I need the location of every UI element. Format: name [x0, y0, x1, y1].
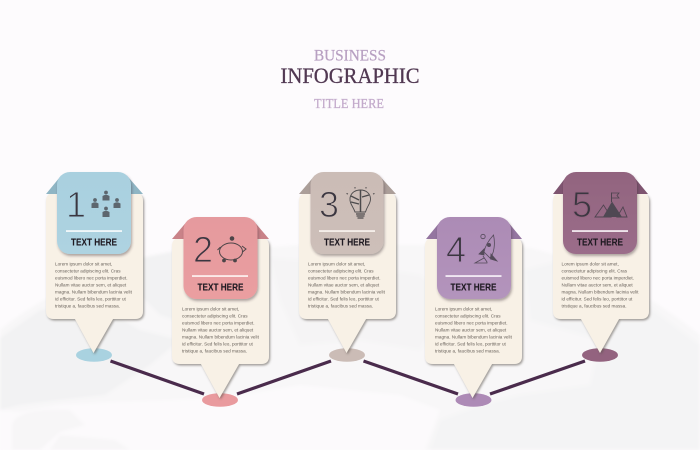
body text 4: consectetur adipiscing elit. Cras [435, 314, 501, 318]
label 4: TEXT HERE [450, 282, 497, 294]
body text 3: Nullam vitae auctor sem, et aliquet [308, 282, 380, 288]
number 3: 3 [319, 184, 339, 225]
ribbon folds 3 [299, 176, 396, 194]
divider 3 [319, 230, 375, 232]
body text 3: consectetur adipiscing elit. Cras [308, 268, 374, 274]
panel: step 3 [299, 172, 396, 362]
note card 3 [299, 193, 396, 353]
body text 5: tristique a, faucibus sed massa. [562, 304, 627, 308]
label 3: TEXT HERE [324, 238, 370, 248]
divider 2 [192, 275, 248, 277]
body text 1: Lorem ipsum dolor sit amet, [55, 262, 112, 266]
note card 4 [425, 238, 522, 398]
body text 4: Nullam vitae auctor sem, et aliquet [435, 328, 507, 332]
marker 3 [329, 348, 365, 362]
body text 2: Lorem ipsum dolor sit amet, [182, 306, 239, 312]
title [280, 48, 420, 111]
body text 1: id efficitur. Sed felis leo, porttitor ut [55, 296, 127, 302]
body text 3: tristique a, faucibus sed massa. [308, 304, 373, 308]
header tile 4 [437, 217, 511, 299]
body text 2: id efficitur. Sed felis leo, porttitor ut [182, 342, 254, 346]
panel: step 4 [425, 217, 522, 407]
body text 5: Lorem ipsum dolor sit amet, [562, 262, 619, 266]
body text 2: Nullam vitae auctor sem, et aliquet [182, 328, 254, 332]
body text 4 [435, 306, 513, 354]
note card 1 [46, 193, 143, 353]
number 2: 2 [193, 229, 213, 270]
body text 3 [308, 262, 386, 308]
body text 1: Nullam vitae auctor sem, et aliquet [55, 282, 127, 288]
body text 3: Lorem ipsum dolor sit amet, [308, 262, 365, 266]
icon: team [92, 191, 120, 217]
body text 3: magna. Nullam bibendum lacinia velit [308, 290, 386, 294]
header tile 2 [184, 217, 258, 299]
connector lines [110, 361, 585, 394]
label 5: TEXT HERE [577, 238, 623, 248]
body text 3: id efficitur. Sed felis leo, porttitor ut [308, 296, 380, 302]
ribbon folds 4 [426, 221, 522, 239]
header tile 5 [563, 172, 637, 254]
label 2: TEXT HERE [198, 282, 244, 294]
number 5: 5 [572, 184, 592, 225]
body text 5: magna. Nullam bibendum lacinia velit [562, 290, 639, 294]
label 1: TEXT HERE [71, 238, 117, 248]
note card 2 [172, 238, 269, 398]
ribbon folds 2 [172, 221, 269, 239]
note card 5 [553, 193, 649, 353]
body text 1: magna. Nullam bibendum lacinia velit [55, 290, 133, 294]
ribbon folds 1 [46, 176, 143, 194]
divider 1 [66, 230, 122, 232]
marker 4 [456, 393, 492, 407]
body text 2 [182, 306, 260, 354]
marker 5 [582, 348, 618, 362]
number 1: 1 [66, 184, 86, 225]
panel: step 5 [553, 172, 649, 362]
ribbon folds 5 [553, 176, 648, 194]
heading: infographic: INFOGRAPHIC [280, 63, 420, 88]
body text 4: id efficitur. Sed felis leo, porttitor ut [435, 342, 507, 346]
panel: step 1 [46, 172, 143, 362]
divider 4 [446, 275, 502, 277]
header tile 3 [310, 172, 384, 254]
body text 4: Lorem ipsum dolor sit amet, [435, 306, 492, 312]
heading: title here: TITLE HERE [314, 96, 384, 111]
body text 5: euismod libero nec porta imperdiet. [562, 276, 634, 280]
body text 4: euismod libero nec porta imperdiet. [435, 320, 507, 326]
body text 2: magna. Nullam bibendum lacinia velit [182, 334, 260, 340]
heading: business: BUSINESS [314, 48, 386, 64]
body text 4: magna. Nullam bibendum lacinia velit [435, 334, 513, 340]
body text 2: consectetur adipiscing elit. Cras [182, 314, 248, 318]
body text 2: tristique a, faucibus sed massa. [182, 348, 247, 354]
body text 3: euismod libero nec porta imperdiet. [308, 276, 380, 280]
icon: piggy bank [218, 237, 246, 262]
body text 4: tristique a, faucibus sed massa. [435, 348, 500, 354]
body text 1 [55, 262, 133, 308]
divider 5 [572, 230, 628, 232]
marker 2 [202, 393, 238, 407]
header tile 1 [57, 172, 131, 254]
body text 1: consectetur adipiscing elit. Cras [55, 268, 121, 274]
marker 1 [76, 348, 112, 362]
body text 1: tristique a, faucibus sed massa. [55, 304, 120, 308]
body text 5: consectetur adipiscing elit. Cras [562, 268, 628, 274]
icon: light bulb [346, 187, 374, 218]
panel: step 2 [172, 217, 269, 407]
icon: rocket [475, 234, 497, 263]
number 4: 4 [446, 229, 466, 270]
body text 5: Nullam vitae auctor sem, et aliquet [562, 282, 633, 288]
body text 5 [562, 262, 639, 308]
icon: mountain flag [595, 192, 627, 217]
body text 5: id efficitur. Sed felis leo, porttitor ut [562, 296, 633, 302]
body text 2: euismod libero nec porta imperdiet. [182, 320, 254, 326]
body text 1: euismod libero nec porta imperdiet. [55, 276, 127, 280]
